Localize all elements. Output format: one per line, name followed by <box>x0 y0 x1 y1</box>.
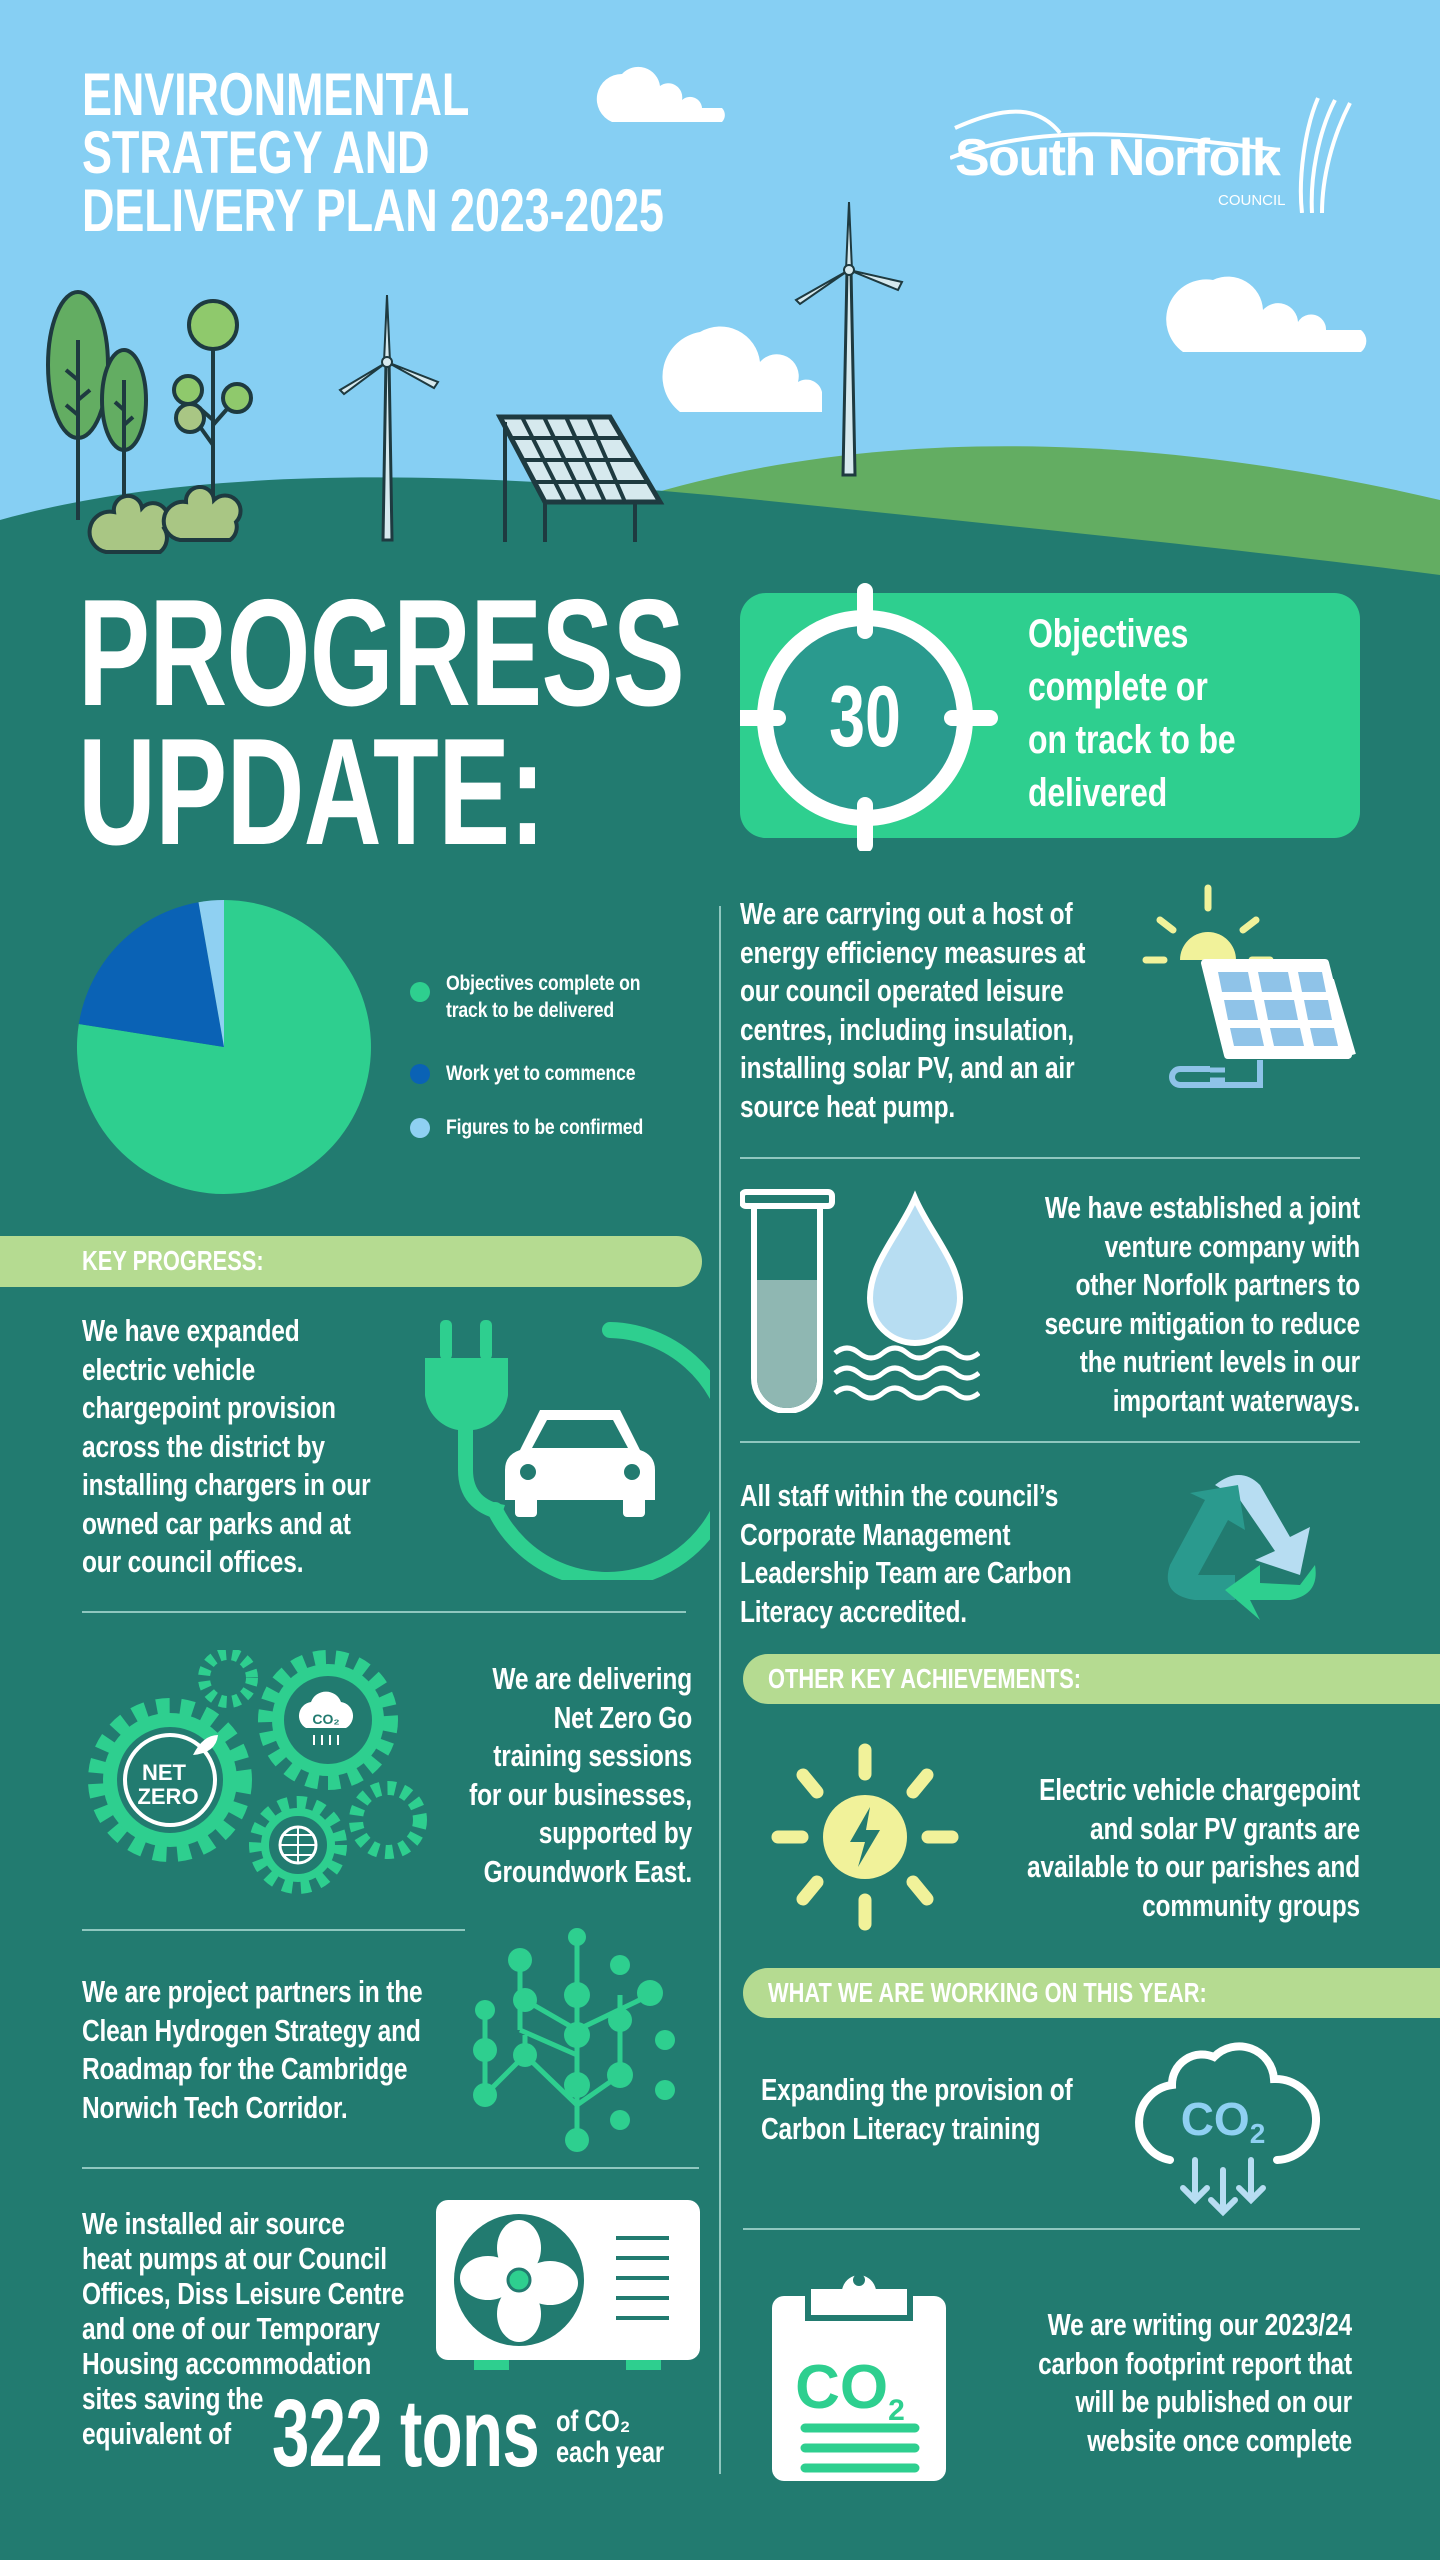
icon: net zero gears: NET <box>142 1760 187 1785</box>
icon: air source heat pump unit <box>436 2200 700 2370</box>
icon: solar panel <box>496 414 664 542</box>
legend: track to be delivered <box>446 999 614 1022</box>
clouds <box>596 66 1366 412</box>
text: objectives complete: Objectives <box>1028 612 1188 656</box>
logo: South Norfolk Council <box>950 97 1352 213</box>
icon: trees and bushes <box>46 290 253 554</box>
text: carbon footprint report: We are writing our 2023/24 <box>1048 2307 1352 2342</box>
icon: plug and car <box>425 1320 710 1580</box>
text: hydrogen: Roadmap for the Cambridge <box>82 2051 407 2086</box>
text: EV chargepoints <box>82 1313 370 1579</box>
text: EV chargepoints: owned car parks and at <box>82 1506 351 1540</box>
text: EV chargepoints: chargepoint provision <box>82 1390 336 1425</box>
text: heat pumps: Housing accommodation <box>82 2346 371 2381</box>
bar: what we are working on: WHAT WE ARE WORKING ON THIS YEAR: <box>768 1977 1207 2008</box>
text: joint venture <box>1044 1190 1360 1418</box>
text: heat pumps: We installed air source <box>82 2206 345 2241</box>
text: net zero go <box>469 1661 692 1888</box>
icon: large wind turbine <box>794 202 904 476</box>
text: heat pumps: sites saving the <box>82 2381 263 2416</box>
text: net zero go: We are delivering <box>492 1661 692 1696</box>
text: carbon literacy training: Carbon Literacy training <box>761 2110 1040 2146</box>
text: carbon literacy: Corporate Management <box>740 1516 1010 1552</box>
text: heat pumps: Offices, Diss Leisure Centre <box>82 2276 404 2311</box>
text: leisure centres: energy efficiency measures at <box>740 934 1085 970</box>
divider vertical <box>719 906 721 2474</box>
text: heat pumps <box>82 2206 404 2451</box>
text: carbon literacy: Literacy accredited. <box>740 1594 967 1628</box>
text: heat pumps: heat pumps at our Council <box>82 2241 387 2276</box>
text: objectives complete <box>1028 612 1236 815</box>
text: grants: Electric vehicle chargepoint <box>1039 1772 1360 1807</box>
text: objectives complete: complete or <box>1028 665 1208 709</box>
bar: what we are working on <box>743 1968 1440 2018</box>
text: of CO2 each year <box>556 2405 664 2469</box>
bar: key progress <box>0 1236 702 1287</box>
text: net zero go: supported by <box>539 1815 692 1850</box>
text: carbon footprint report: website once complete <box>1087 2422 1352 2458</box>
title: ENVIRONMENTAL <box>82 61 469 128</box>
text: leisure centres <box>740 896 1086 1124</box>
title <box>82 61 664 244</box>
panel: 30 objectives <box>740 593 1360 838</box>
text: heat pumps: and one of our Temporary <box>82 2311 380 2346</box>
icon: target with 30: 30 <box>829 669 901 765</box>
icon: solar panel with sun <box>1142 884 1356 1088</box>
text: EV chargepoints: installing chargers in our <box>82 1467 370 1502</box>
text: carbon literacy: All staff within the council’s <box>740 1478 1058 1513</box>
text: heat pumps: equivalent of <box>82 2416 231 2451</box>
title: DELIVERY PLAN 2023-2025 <box>82 177 664 244</box>
stat: 322 tons: 322 tons <box>272 2380 539 2487</box>
logo: South Norfolk Council: COUNCIL <box>1218 192 1286 209</box>
icon: CO2 clipboard: 2 <box>888 2394 905 2427</box>
text: of CO2 each year: each year <box>556 2436 664 2469</box>
text: carbon literacy <box>740 1478 1072 1628</box>
text: carbon literacy: Leadership Team are Carbon <box>740 1555 1072 1590</box>
text: objectives complete: on track to be <box>1028 718 1236 762</box>
text: carbon literacy training: Expanding the provision of <box>761 2072 1073 2107</box>
legend <box>410 972 643 1139</box>
icon: CO2 cloud: CO <box>1181 2093 1250 2145</box>
text: joint venture: venture company with <box>1105 1228 1360 1264</box>
title: STRATEGY AND <box>82 119 429 186</box>
text: hydrogen <box>82 1974 422 2124</box>
text: joint venture: the nutrient levels in our <box>1080 1344 1360 1379</box>
heading: progress update: PROGRESS <box>78 568 684 738</box>
text: hydrogen: Norwich Tech Corridor. <box>82 2090 348 2124</box>
text: hydrogen: Clean Hydrogen Strategy and <box>82 2012 421 2048</box>
text: joint venture: important waterways. <box>1113 1382 1360 1418</box>
logo: South Norfolk Council: South Norfolk <box>955 129 1279 187</box>
legend: Work yet to commence <box>446 1062 635 1085</box>
text: grants: available to our parishes and <box>1027 1849 1360 1884</box>
text: carbon footprint report: carbon footprint report that <box>1038 2346 1352 2380</box>
icon: small wind turbine <box>338 295 440 542</box>
heading: progress update: UPDATE: <box>78 707 545 877</box>
icon: hydrogen network <box>473 1928 675 2152</box>
text: objectives complete: delivered <box>1028 771 1167 815</box>
heading: progress update <box>78 568 684 877</box>
icon: target with 30 <box>740 583 998 851</box>
text: EV chargepoints: across the district by <box>82 1428 325 1464</box>
text: EV chargepoints: electric vehicle <box>82 1352 255 1386</box>
icon: recycle <box>1168 1475 1316 1620</box>
icon: net zero gears: ZERO <box>137 1784 199 1809</box>
text: leisure centres: our council operated leisure <box>740 973 1064 1008</box>
text: net zero go: Groundwork East. <box>484 1854 692 1888</box>
icon: CO2 cloud: 2 <box>1250 2118 1265 2149</box>
chart: pie <box>77 900 371 1194</box>
text: joint venture: other Norfolk partners to <box>1075 1267 1360 1302</box>
text: grants: community groups <box>1142 1888 1360 1922</box>
text: leisure centres: centres, including insulation, <box>740 1012 1074 1046</box>
icon: net zero gears <box>88 1650 427 1894</box>
text: of CO2 each year: of CO₂ <box>556 2405 630 2438</box>
text: leisure centres: source heat pump. <box>740 1088 955 1124</box>
text: grants: and solar PV grants are <box>1090 1810 1360 1846</box>
text: carbon literacy training <box>761 2072 1073 2146</box>
text: net zero go: for our businesses, <box>469 1776 692 1812</box>
text: leisure centres: installing solar PV, and an air <box>740 1050 1074 1085</box>
bar: other key achievements: OTHER KEY ACHIEVEMENTS: <box>768 1663 1081 1694</box>
text: EV chargepoints: We have expanded <box>82 1313 300 1348</box>
text: joint venture: secure mitigation to reduce <box>1044 1306 1360 1340</box>
icon: CO2 cloud <box>1135 2042 1320 2216</box>
icon: CO2 clipboard <box>772 2276 946 2481</box>
text: net zero go: training sessions <box>493 1738 692 1773</box>
bar: key progress: KEY PROGRESS: <box>82 1245 264 1276</box>
text: joint venture: We have established a joint <box>1045 1190 1360 1225</box>
icon: net zero gears: CO₂ <box>312 1711 340 1727</box>
text: carbon footprint report <box>1038 2307 1352 2458</box>
text: leisure centres: We are carrying out a host of <box>740 896 1072 931</box>
text: carbon footprint report: will be published on our <box>1076 2384 1352 2419</box>
text: grants <box>1027 1772 1360 1922</box>
icon: sun with bolt <box>772 1744 958 1930</box>
icon: CO2 clipboard: CO <box>795 2353 888 2422</box>
bar: other key achievements <box>743 1654 1440 1704</box>
legend: Objectives complete on <box>446 972 640 995</box>
icon: test tube and water drop <box>740 1189 980 1413</box>
text: net zero go: Net Zero Go <box>554 1700 692 1734</box>
text: hydrogen: We are project partners in the <box>82 1974 422 2009</box>
text: EV chargepoints: our council offices. <box>82 1544 303 1579</box>
legend: Figures to be confirmed <box>446 1116 643 1139</box>
